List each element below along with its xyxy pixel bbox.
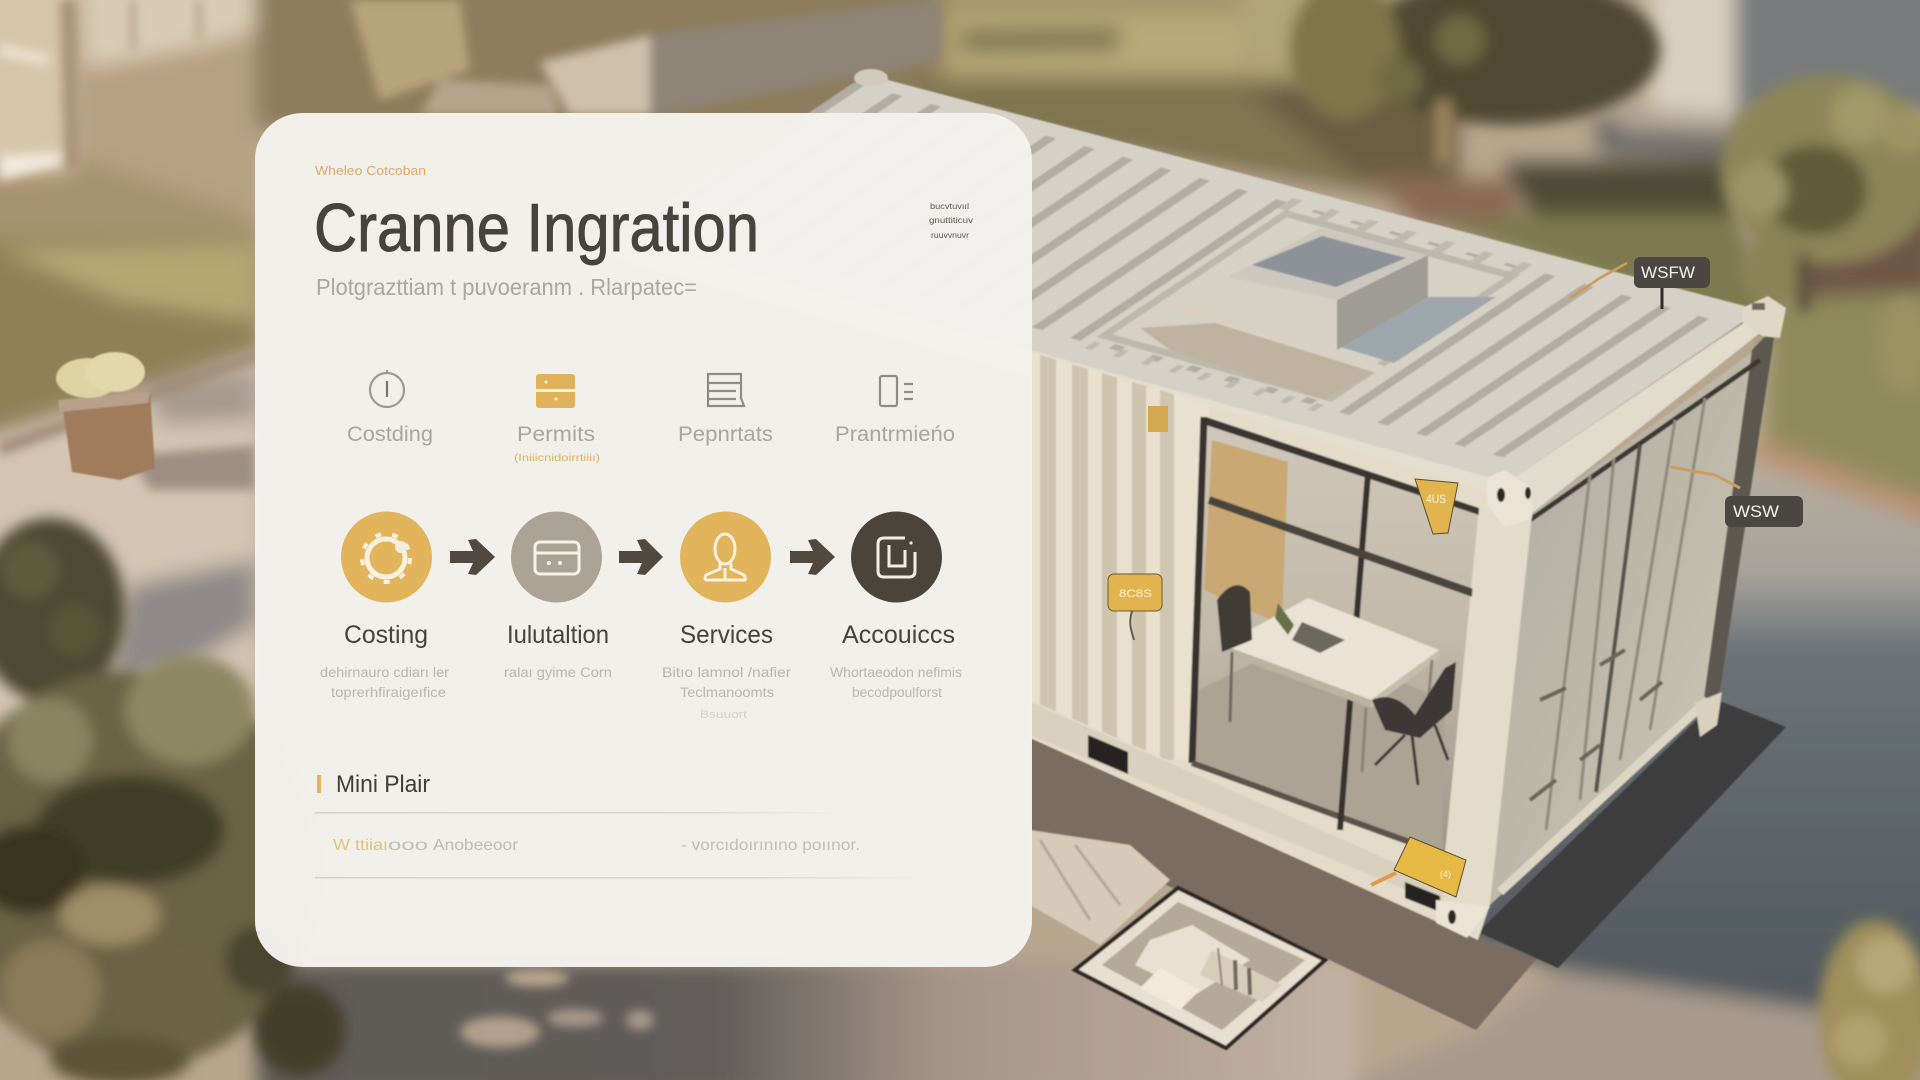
top row labels: [347, 423, 955, 446]
yellow marker: base corner: (4): [1440, 869, 1451, 879]
container long side wall: [1030, 340, 1507, 940]
yellow patch on wall: [1148, 406, 1168, 432]
arrow 2: [619, 539, 663, 575]
yellow marker: side wall: 8C8S: [1119, 588, 1152, 600]
mini plan row: [333, 837, 860, 854]
step 3 description: [662, 664, 791, 721]
step 1 label: Costing: [344, 621, 428, 649]
subtitle: Plotgrazttiam t puvoeranm . Rlarpatec=: [316, 274, 697, 300]
front corner post: [1436, 470, 1532, 940]
small note: ruuvvnuvr: [931, 231, 969, 240]
mini plan row: W ttiiaı: [333, 837, 388, 854]
tag: WSW: [1671, 467, 1803, 527]
background building details: [0, 0, 940, 1048]
title: Cranne Ingration: [314, 190, 759, 266]
step 2: installation: [504, 512, 612, 680]
top row labels: Costding: [347, 423, 433, 446]
mini plan row: ooo: [388, 837, 428, 854]
eyebrow text: Wheleo Cotcoban: [315, 163, 426, 178]
step 1 description: dehirnauro cdiarı ler: [320, 664, 449, 680]
container door end: [1490, 325, 1776, 905]
step 1 description: [320, 664, 449, 700]
arrow 1: [450, 539, 495, 575]
step 4 circle icon: [851, 512, 942, 602]
icon: panel with list: [880, 376, 913, 406]
container shadow: [1478, 700, 1786, 968]
tag: WSW: WSW: [1733, 502, 1779, 521]
step 3 description: Teclmanoomts: [680, 684, 774, 700]
step 4 description: becodpoulforst: [852, 684, 942, 700]
panel: glass information card: [255, 113, 1032, 967]
small note: [929, 202, 973, 240]
icon: permit card: [536, 374, 575, 408]
shipping container: [808, 68, 1787, 968]
interior table: [1223, 598, 1439, 772]
small note: gnuttiticuv: [929, 216, 973, 225]
container roof: [616, 69, 1770, 515]
tag: WSFW: [1570, 257, 1710, 309]
top row labels: Permits: [517, 423, 595, 446]
rooftop skylight box: [1228, 228, 1428, 350]
tag: WSFW: WSFW: [1641, 263, 1695, 282]
step 1: costing: [320, 512, 449, 700]
small note: bucvtuvııl: [930, 202, 969, 211]
step 3 description: Bitıo lamnol /nafier: [662, 664, 791, 680]
arrow 3: [790, 539, 835, 575]
step 2 circle icon: [511, 512, 602, 602]
step 2 label: Iulutaltion: [507, 621, 609, 649]
mini plan heading: Mini Plair: [336, 771, 430, 798]
permits sub-label: (Iniiicnidoirrtiiiı): [514, 453, 600, 464]
step 1 description: toprerhfiraigeıfice: [331, 684, 446, 700]
mini plan row: - vorcıdoırınıno poıınor.: [681, 837, 860, 854]
yellow marker: roof corner: 4US: [1426, 492, 1446, 506]
yellow marker: base corner: [1371, 837, 1466, 897]
mini floor plan: [1075, 888, 1325, 1048]
step 4 description: Whortaeodon nefimis: [830, 664, 962, 680]
step 2 description: ralaı gyime Corn: [504, 664, 612, 680]
step 4 label: Accouiccs: [842, 621, 955, 649]
wooden deck: [1030, 737, 1538, 1030]
top row labels: Pepnrtats: [678, 423, 773, 446]
step 3 label: Services: [680, 621, 773, 649]
step 4 description: [830, 664, 962, 700]
yellow marker: roof corner: [1415, 479, 1458, 534]
icon: clock: [370, 370, 404, 407]
step 3: services: [662, 512, 791, 721]
step 1 circle icon: [341, 512, 432, 602]
step 3 circle icon: [680, 512, 771, 602]
glass window with interior: [1192, 417, 1479, 855]
mini plan row: Anobeeoor: [433, 837, 519, 854]
icon: document: [708, 374, 744, 406]
interior chairs: [1217, 585, 1456, 785]
potted plant: [56, 352, 155, 480]
top row labels: Prantrmieńo: [835, 423, 955, 446]
step 3 description: Bsuuort: [700, 709, 747, 721]
rear corner casting: [1742, 296, 1786, 338]
step 4: accounts: [830, 512, 962, 700]
yellow marker: side wall: [1108, 574, 1162, 640]
